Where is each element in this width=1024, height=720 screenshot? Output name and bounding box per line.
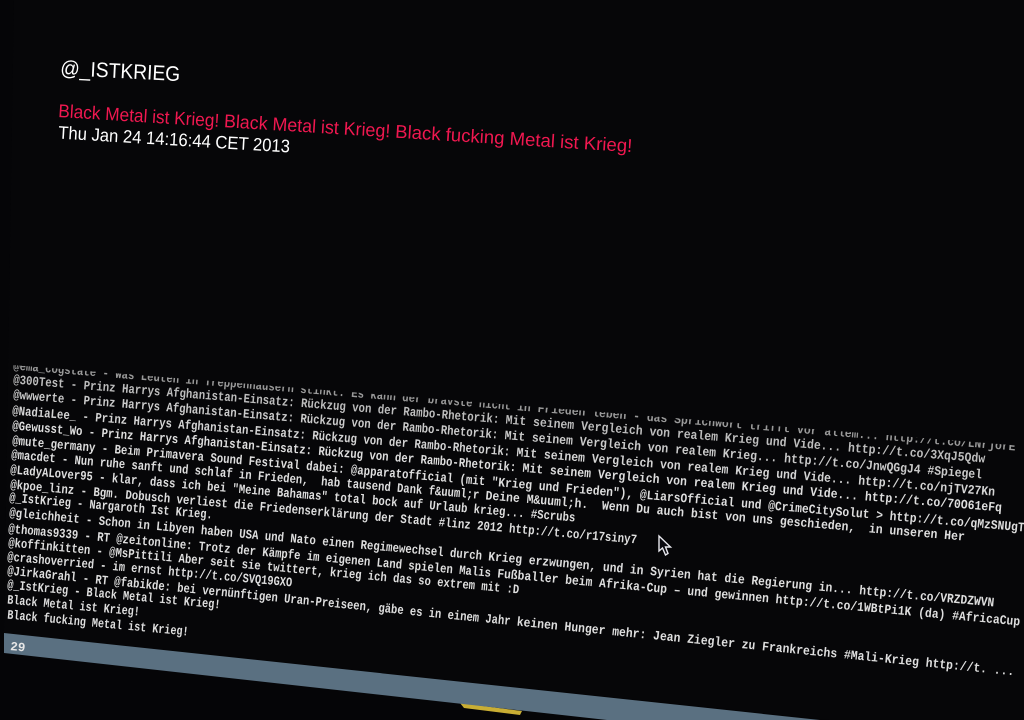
terminal tweet log: @kpoe_linz - Bgm. Dobusch verliest die Friedenserklärung der Stadt #linz 2012 http://t.co/r17siny7 <box>10 478 638 547</box>
title: @_ISTKRIEG <box>60 57 181 86</box>
status bar <box>4 633 820 720</box>
terminal tweet log: @300Test - Prinz Harrys Afghanistan-Einsatz: Rückzug von der Rambo-Rhetorik: <box>13 373 506 428</box>
red tweet text: Black Metal ist Krieg! <box>58 100 225 131</box>
terminal tweet log: @crashoverried - im ernst http://t.co/SVQ19GXO <box>7 550 293 590</box>
terminal tweet log: @koffinkitten - @MsPittili Aber seit sie twittert, krieg ich das so extrem mit :D <box>8 536 520 597</box>
terminal tweet log: Black Metal ist Krieg! <box>7 593 140 620</box>
terminal tweet log: @gleichheit - Schon in Libyen haben USA und Nato einen Regimewechsel durch <box>9 506 489 564</box>
terminal tweet log: @NadiaLee_ - Prinz Harrys Afghanistan-Einsatz: Rückzug von der Rambo-Rhetorik: <box>12 404 517 460</box>
terminal tweet log: @thomas9339 - RT @zeitonline: Trotz der Kämpfe im eigenen Land spielen Malis <box>8 522 498 581</box>
terminal tweet log: @Gewusst_Wo - Prinz Harrys Afghanistan-Einsatz: Rückzug von der Rambo-Rhetorik: <box>12 419 523 476</box>
red tweet text: Black fucking Metal ist Krieg! <box>395 121 633 156</box>
timestamp: Thu Jan 24 14:16:44 CET 2013 <box>58 123 291 156</box>
terminal tweet log: @mute_germany - Beim Primavera Sound Festival dabei: @apparatofficial (mit <box>12 434 492 490</box>
terminal tweet log: @macdet - Nun ruhe sanft und schlaf in Frieden, hab tausend Dank f&uuml;r <box>11 448 486 503</box>
terminal tweet log: Deine M&uuml;h. Wenn Du auch bist von uns geschieden, in unseren Her <box>485 488 965 545</box>
yellow sticker below status bar <box>460 703 522 715</box>
terminal tweet log: Black fucking Metal ist Krieg! <box>7 608 189 640</box>
terminal tweet log <box>7 359 1024 679</box>
status bar counter: 29 <box>10 640 26 655</box>
red tweet text: Black Metal ist Krieg! <box>223 110 396 142</box>
red tweet text <box>58 100 633 156</box>
terminal tweet log: @_IstKrieg - Black Metal ist Krieg! <box>7 578 221 612</box>
icon: mouse cursor <box>659 536 670 555</box>
terminal tweet log: @_IstKrieg - Nargaroth Ist Krieg. <box>9 491 213 523</box>
terminal tweet log: @JirkaGrahl - RT @fabikde: bei vernünftigen Uran-Preiseen, gäbe es in einem Jahr <box>7 564 518 630</box>
terminal tweet log: @LadyALover95 - klar, dass ich bei "Meine Bahamas" total bock auf Urlaub krieg... #Scrubs <box>10 463 576 526</box>
terminal tweet log: @ema_cogstate - Was Leuten in Treppenhäusern stinkt. Es kann der bravste nicht <box>13 359 518 414</box>
terminal tweet log: @wwwerte - Prinz Harrys Afghanistan-Einsatz: Rückzug von der Rambo-Rhetorik: <box>13 388 505 443</box>
